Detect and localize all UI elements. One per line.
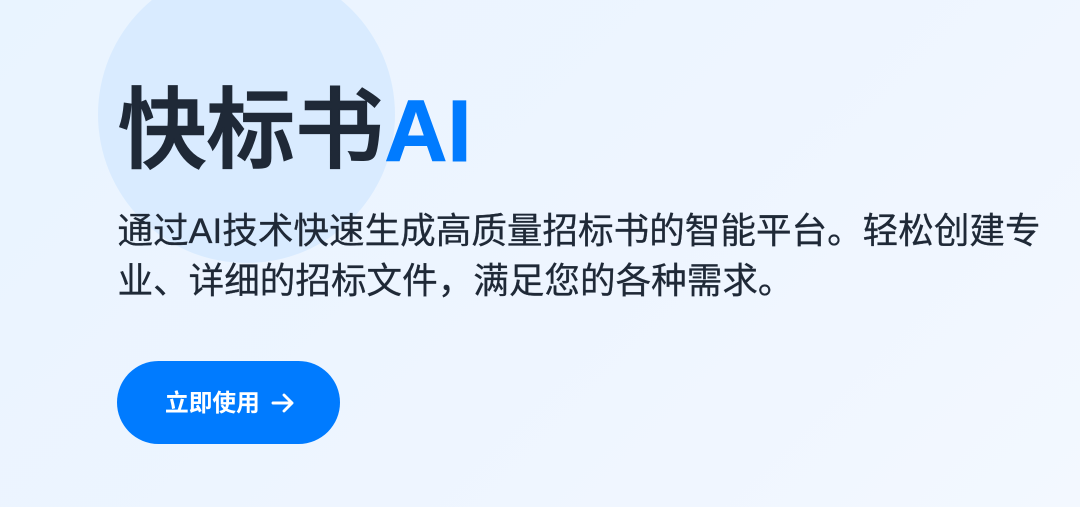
icon: arrow xyxy=(272,394,294,412)
description text: 业、详细的招标文件，满足您的各种需求。 xyxy=(118,261,793,301)
title: 快标书AI xyxy=(118,81,472,180)
description text xyxy=(118,211,1041,301)
description text: 通过AI技术快速生成高质量招标书的智能平台。轻松创建专 xyxy=(118,211,1041,251)
decorative circle xyxy=(98,0,395,263)
button xyxy=(117,361,340,444)
button label: 立即使用 xyxy=(165,391,260,417)
